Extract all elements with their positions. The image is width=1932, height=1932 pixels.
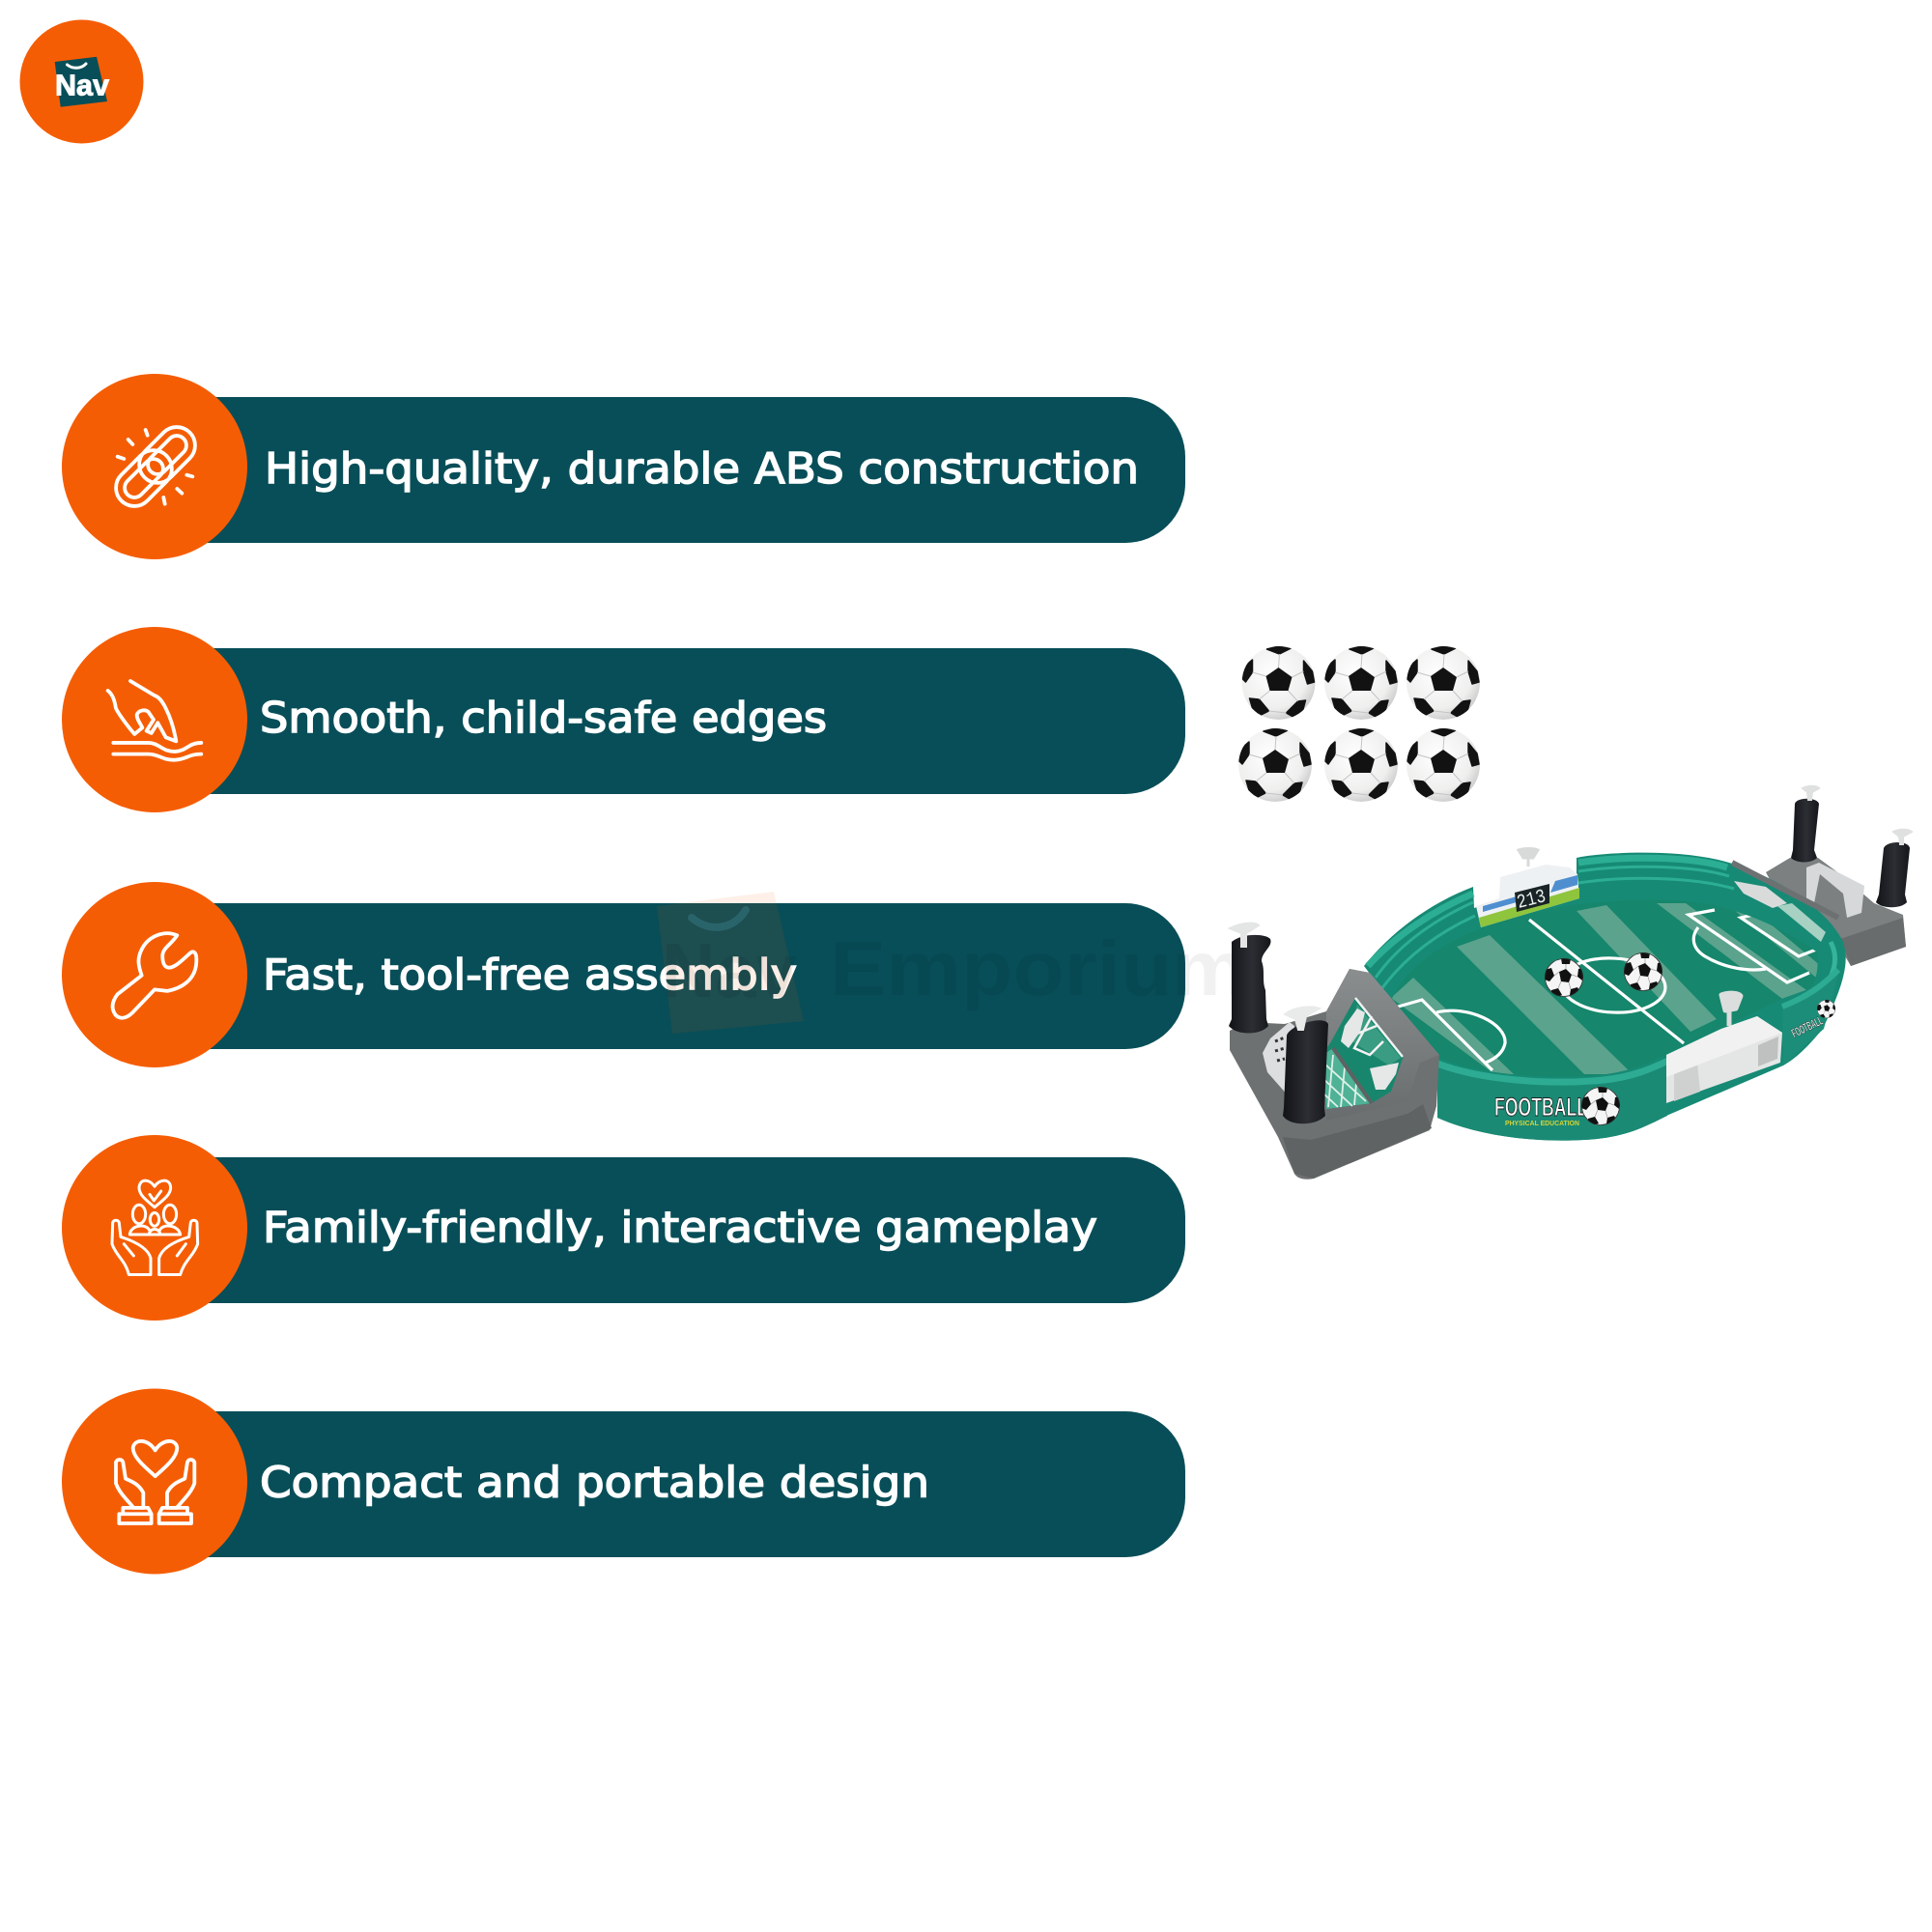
near handle 2 xyxy=(1283,1007,1328,1123)
watermark: Nav xyxy=(662,927,797,1013)
watermark xyxy=(657,892,1247,1034)
near white cage xyxy=(1263,1022,1294,1096)
pitch xyxy=(1388,863,1838,1076)
badge 4 xyxy=(62,1135,247,1321)
far handle 1 xyxy=(1791,786,1819,862)
feature row 4 xyxy=(62,1135,1185,1321)
field ball left xyxy=(1545,958,1583,997)
label 1: High-quality, durable ABS construction xyxy=(265,444,1139,494)
scoreboard xyxy=(1476,848,1579,927)
far goal bar xyxy=(1732,863,1838,918)
keeper gloves xyxy=(1341,1009,1365,1048)
product name on front wall: PHYSICAL EDUCATION xyxy=(1505,1121,1579,1127)
feature row 1 xyxy=(62,374,1185,559)
near goal pit xyxy=(1321,998,1404,1109)
product name on front wall xyxy=(1494,1087,1620,1127)
pill 2 xyxy=(145,648,1185,794)
icon: chain links xyxy=(108,419,203,514)
label 2: Smooth, child-safe edges xyxy=(260,694,827,743)
far white goal xyxy=(1806,863,1864,918)
badge 5 xyxy=(62,1389,247,1575)
base lower lip xyxy=(1283,1104,1432,1179)
icon: wrench xyxy=(113,933,196,1018)
near handle 1 xyxy=(1229,923,1270,1034)
ball 1 xyxy=(1242,646,1316,720)
product: tabletop football game xyxy=(1229,786,1912,1179)
badge 2 xyxy=(62,627,247,812)
small side ball xyxy=(1817,1000,1835,1018)
icon: family in caring hands xyxy=(112,1180,198,1274)
ball 4 xyxy=(1238,728,1312,802)
feature row 2 xyxy=(62,627,1185,812)
icon: heart in hands xyxy=(116,1441,194,1523)
far keeper glove xyxy=(1734,881,1787,908)
pill 1 xyxy=(145,397,1185,543)
label 5: Compact and portable design xyxy=(260,1459,929,1507)
near gray goal assembly xyxy=(1229,923,1439,1179)
badge 1 xyxy=(62,374,247,559)
far handle 2 xyxy=(1876,830,1912,907)
field ball right xyxy=(1624,952,1662,991)
ball 6 xyxy=(1406,728,1480,802)
pill 3 xyxy=(145,903,1185,1049)
front wall xyxy=(1437,968,1840,1141)
watermark: Emporium xyxy=(830,925,1247,1011)
ball 3 xyxy=(1406,646,1480,720)
base xyxy=(1230,969,1439,1179)
pill 4 xyxy=(145,1157,1185,1303)
feature row 3 xyxy=(62,882,1185,1067)
ball 5 xyxy=(1324,728,1398,802)
near goal frame xyxy=(1352,998,1403,1057)
small side logo: FOOTBALL xyxy=(1789,1013,1825,1040)
score display: 213 xyxy=(1515,886,1548,915)
near frame xyxy=(1326,969,1439,1121)
pill 5 xyxy=(145,1411,1185,1557)
near pitch end xyxy=(1348,1005,1401,1065)
far net xyxy=(1777,903,1826,942)
far gray goal base xyxy=(1766,786,1912,966)
oval tray xyxy=(1364,853,1846,1141)
icon: hand touching smooth surface xyxy=(108,681,201,760)
badge 3 xyxy=(62,882,247,1067)
feature row 5 xyxy=(62,1389,1185,1575)
white stand xyxy=(1666,993,1782,1103)
logo badge xyxy=(19,19,143,143)
logo badge: Nav xyxy=(55,68,110,102)
product name on front wall: FOOTBALL xyxy=(1494,1093,1587,1122)
label 3: Fast, tool-free assembly xyxy=(263,951,797,1000)
field lines xyxy=(1388,910,1816,1070)
ball 2 xyxy=(1324,646,1398,720)
label 4: Family-friendly, interactive gameplay xyxy=(263,1204,1097,1252)
infographic canvas xyxy=(19,19,1913,1575)
light stripes xyxy=(1391,903,1821,1074)
spare balls group xyxy=(1238,646,1480,802)
